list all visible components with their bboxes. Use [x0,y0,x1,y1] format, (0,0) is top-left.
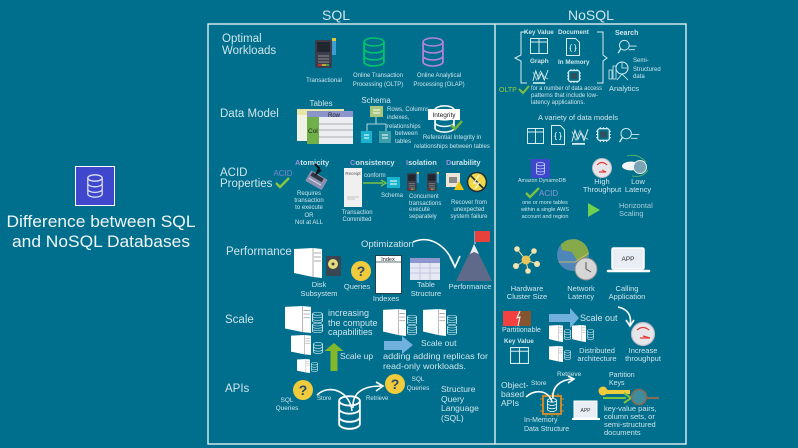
icon: database [76,166,114,206]
disk subsystem: Disk [312,280,326,289]
document [558,29,590,56]
label: OLTP: Online Transaction [353,73,403,79]
scale-up description: increasing [328,308,369,318]
label: OLTP: Processing (OLTP) [353,82,403,88]
column: isolation [406,158,441,220]
column: atomicity: Requires [297,191,321,197]
in-memory chip [540,393,564,417]
ACID check: ACID [273,169,293,178]
ACID description: account and region [522,214,568,220]
in memory [558,59,590,83]
OLTP description line 2: patterns that include low- [531,93,598,99]
scale-out description line 2: read-only workloads. [383,361,466,371]
icon: integrity database: Integrity [432,112,456,119]
heading: Scale [225,314,254,326]
column heading: SQL: SQL [322,7,350,23]
integrity caption: relationships between tables [414,144,490,150]
arrows: store and retrieve [317,382,383,411]
hardware cluster [507,246,547,301]
column: consistency: Receipt [345,171,361,176]
low latency icon: Low [631,177,645,186]
column: consistency: Committed [342,217,372,223]
heading: Workloads [222,45,276,57]
column: durability: system failure [450,214,488,220]
label: retrieve: Retrieve [557,371,582,378]
queries: ? [357,263,365,279]
description: (SQL) [441,413,464,423]
optimization arrow: Optimization [361,239,414,250]
column: consistency: Schema [381,193,404,199]
semi-structured: Structured [633,67,661,73]
semi-structured: data [633,74,645,80]
column: atomicity: transaction [294,198,324,204]
icon: white database [339,396,360,429]
app laptop: APP [580,408,591,414]
column heading: NoSQL: NoSQL [568,7,614,23]
label: horizontal scaling: Scaling [619,209,644,218]
panel: NoSQL data model [527,113,639,144]
indexes [373,256,402,303]
label: tables: Tables [309,99,333,108]
semi-structured: Semi- [633,58,649,64]
calling application [608,248,649,301]
key and magnifier [598,386,659,404]
table structure: Table [417,280,435,289]
high throughput gauge: High [594,177,610,186]
network latency: Network [567,284,595,293]
optimization arrow [361,239,460,267]
panel: SQL APIs [225,374,479,429]
disk subsystem: Subsystem [300,289,338,298]
label: partition keys: Keys [609,380,625,387]
label: OLAP: Processing (OLAP) [413,82,465,88]
heading: Object- [501,380,528,390]
title text: Difference between SQL [6,213,196,231]
search [615,30,638,53]
label: SQL queries right: Queries [407,385,430,392]
partitionable [502,311,541,334]
scale-up description: the compute [328,318,378,328]
question icon left: ? [299,382,307,398]
partitionable: Partitionable [502,327,541,334]
network latency [557,239,597,301]
icon: tables with row and column [297,109,353,144]
label: distributed architecture: Distributed [579,346,615,355]
icon: schema tree [361,106,391,143]
label: retrieve: Retrieve [366,396,389,402]
key value: Key Value [524,29,554,36]
column: durability: Recover from [451,200,487,206]
app laptop [572,401,600,419]
store and retrieve arrows [526,376,574,402]
icon: purple database [423,38,443,66]
column: atomicity: Atomicity [295,158,330,167]
label: distributed architecture: architecture [577,354,617,363]
title text: and NoSQL Databases [12,233,190,251]
column: atomicity: OR [304,213,314,219]
panel: NoSQL performance [507,239,649,301]
column: consistency [341,158,404,223]
high throughput gauge: Throughput [583,185,622,194]
label: SQL queries right: SQL [411,376,425,383]
arrow: scale up [324,343,344,371]
OLTP description: for a number of data access [531,86,602,92]
analytics: Analytics [609,84,639,93]
label: transactional: Transactional [306,78,342,84]
column: durability [446,158,488,220]
icon: payment terminal [315,38,336,68]
description: Query [441,394,465,404]
icon: green database [364,38,384,66]
scale-up servers [285,306,322,373]
panel: SQL ACID properties [220,158,488,226]
calling application: Application [609,292,645,301]
in memory: In Memory [558,59,590,66]
hardware cluster: Hardware [511,284,543,293]
calling application: APP [621,256,635,263]
table structure: Structure [411,289,441,298]
OLTP check [499,86,529,94]
distributed servers [549,325,594,362]
data model icons [527,126,639,144]
key-value description: semi-structured [604,420,656,429]
heading: APIs [501,398,519,408]
calling application: Calling [616,284,638,293]
column: durability: Durability [446,158,481,167]
heading: Properties [220,178,273,190]
schema description: relationships [387,124,421,130]
heading: Optimal [222,33,262,45]
analytics [609,62,639,93]
key value [524,29,554,54]
column: isolation: execute [409,207,431,213]
label: DynamoDB: Amazon DynamoDB [518,178,566,184]
heading: APIs [225,383,250,395]
ACID check: ACID [539,189,558,198]
label: in-memory data structure: In-Memory [524,417,557,424]
label: SQL queries left: Queries [276,405,299,412]
panel: SQL performance [226,231,492,303]
column: consistency: Transaction [341,210,373,216]
icon: tables with row and column: Col [308,128,318,135]
low latency icon [622,155,651,194]
key-value description: key-value pairs, [604,404,657,413]
title text [6,213,196,251]
schema description: indexes, [387,115,410,121]
heading: ACID [220,167,247,179]
column: atomicity [294,158,330,226]
document: Document [558,29,590,36]
graph [530,58,549,83]
increase throughput gauge: throughput [625,354,662,363]
ACID description: one or more tables [522,200,568,206]
description: Structure [441,384,476,394]
ACID check [273,169,293,187]
comparison frame [208,24,686,444]
label: scale out: Scale out [421,338,457,348]
scale-out servers [383,309,456,336]
panel: SQL optimal workloads [222,33,465,88]
question icon right: ? [391,376,399,392]
key-value description: column sets, or [604,412,655,421]
OLTP check: OLTP [499,87,517,94]
label: store: Store [317,396,332,402]
label: in-memory data structure: Data Structure [524,426,569,433]
question icon left [293,380,313,400]
label: store: Store [531,380,547,387]
network latency: Latency [568,292,594,301]
label: schema: Schema [361,96,391,105]
heading: Data Model [220,108,279,120]
arrow: scale out [384,336,413,354]
column: atomicity: to execute [295,205,324,211]
label: OLAP: Online Analytical [417,73,461,79]
scale-up description: capabilities [328,327,373,337]
integrity caption: Referential Integrity in [423,135,481,141]
key value table [504,338,534,363]
column: consistency: conform [364,173,386,179]
queries: Queries [344,282,370,291]
question icon right [385,374,405,394]
panel: SQL scale [225,306,488,373]
panel: NoSQL APIs [501,371,659,437]
key value table: Key Value [504,338,534,345]
panel: SQL data model [220,96,490,150]
increase throughput gauge [625,322,662,363]
schema description: between [395,131,418,137]
column: isolation: Concurrent [409,194,439,200]
description: Language [441,403,479,413]
indexes: Index [381,257,395,263]
heading: based [501,389,524,399]
left title block [6,166,196,251]
schema description: tables [395,139,411,145]
icon: DynamoDB [531,159,550,178]
key-value description: documents [604,428,641,437]
ACID description: within a single AWS [520,207,569,213]
label: partition keys: Partition [609,372,635,379]
label: scale up: Scale up [340,351,373,361]
column: atomicity: Not at ALL [295,220,324,226]
arrow: horizontal scaling [588,203,600,217]
panel: NoSQL ACID properties [518,155,653,220]
column: isolation: separately [409,214,437,220]
data model braces [515,32,607,83]
label: horizontal scaling: Horizontal [619,201,653,210]
curved arrow [618,307,634,326]
panel: NoSQL scale [502,307,662,363]
scale-out description: adding adding replicas for [383,351,488,361]
column: durability: unexpected [453,207,485,213]
increase throughput gauge: Increase [629,346,657,355]
heading: Performance [226,246,292,258]
mountain and flag: Performance [449,282,491,291]
icon: tables with row and column: Row [328,113,341,119]
column: isolation: Isolation [406,158,437,167]
queries [344,261,371,291]
arrow: scale out [549,308,579,328]
mountain and flag [449,231,492,291]
OLTP description line 3: latency applications. [531,100,585,106]
column: isolation: transactions [409,201,441,207]
column: consistency: Consistency [350,158,395,167]
heading: A variety of data models [538,113,618,122]
search: Search [615,30,638,37]
schema description: Rows, Columns, [387,107,431,113]
indexes: Indexes [373,294,399,303]
panel: NoSQL optimal workloads [499,29,661,106]
label: scale out: Scale out [580,313,618,323]
low latency icon: Latency [625,185,651,194]
hardware cluster: Cluster Size [507,292,547,301]
table structure [410,258,441,298]
disk subsystem [294,248,341,298]
icon: integrity database [428,106,462,132]
label: SQL queries left: SQL [280,397,294,404]
graph: Graph [530,58,549,65]
high throughput gauge [583,158,622,194]
